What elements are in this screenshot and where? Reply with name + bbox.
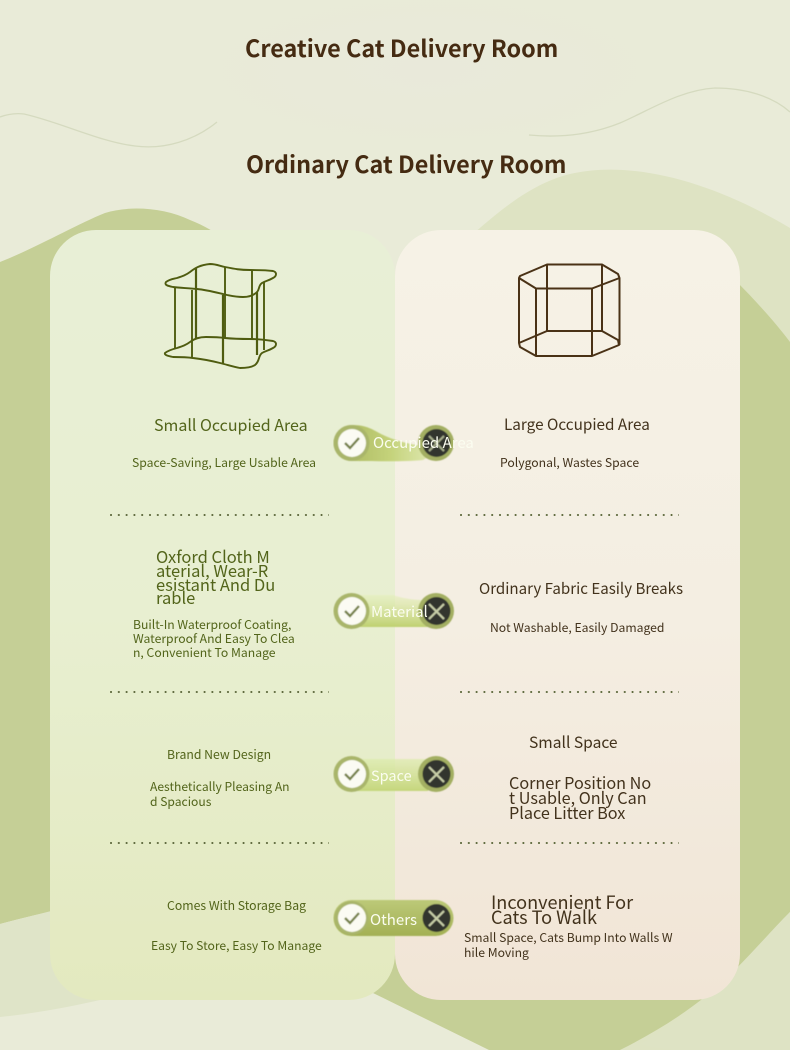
pill: others: [333, 900, 454, 937]
text: inconvenient: [491, 889, 634, 930]
pill: occupied area: Occupied Area: [373, 432, 474, 453]
text: polygonal: Polygonal, Wastes Space: [500, 453, 639, 471]
pill: others: Others: [370, 909, 417, 930]
text: aesthetically: d Spacious: [150, 793, 211, 810]
light blob right: [460, 170, 790, 1050]
text: waterproof: [133, 615, 295, 661]
text: oxford cloth: Oxford Cloth M: [156, 544, 270, 568]
text: oxford cloth: [156, 544, 275, 609]
text: aesthetically: Aesthetically Pleasing An: [150, 778, 290, 795]
panel: creative: [50, 230, 395, 1000]
pill: space: Space: [371, 765, 412, 786]
text: oxford cloth: aterial, Wear-R: [156, 558, 268, 582]
text: large occupied area: Large Occupied Area: [504, 413, 650, 435]
text: small space: Small Space: [529, 731, 618, 753]
text: waterproof: n, Convenient To Manage: [133, 643, 276, 661]
text: small space bump: Small Space, Cats Bump Into Walls W: [464, 928, 673, 946]
pill: occupied area: [333, 424, 474, 462]
panel: ordinary: [395, 230, 740, 1000]
text: small occupied area: Small Occupied Area: [154, 412, 308, 436]
icon: curved cage: [164, 263, 277, 369]
text: storage bag: Comes With Storage Bag: [167, 896, 306, 914]
text: corner position: Place Litter Box: [509, 800, 625, 824]
pill: material: Material: [371, 601, 428, 622]
text: inconvenient: Cats To Walk: [491, 904, 597, 930]
text: aesthetically: [150, 778, 290, 810]
title: ordinary: Ordinary Cat Delivery Room: [246, 146, 566, 180]
text: waterproof: Waterproof And Easy To Clea: [133, 629, 295, 647]
title: creative: Creative Cat Delivery Room: [245, 30, 558, 64]
curve lines: [0, 114, 217, 147]
text: space-saving: Space-Saving, Large Usable Area: [132, 453, 316, 471]
text: oxford cloth: rable: [156, 585, 195, 609]
divider row 1: [110, 514, 329, 516]
text: brand new design: Brand New Design: [167, 745, 271, 763]
text: corner position: t Usable, Only Can: [509, 785, 647, 809]
light band bottom left: [0, 910, 140, 1017]
text: waterproof: Built-In Waterproof Coating,: [133, 615, 291, 633]
pill: material: [333, 592, 455, 630]
pill: space: [333, 755, 455, 793]
text: small space bump: hile Moving: [464, 942, 529, 960]
text: small space bump: [464, 928, 673, 960]
text: oxford cloth: esistant And Du: [156, 572, 275, 596]
text: not washable: Not Washable, Easily Damaged: [490, 618, 664, 636]
text: corner position: Corner Position No: [509, 770, 651, 794]
text: inconvenient: Inconvenient For: [491, 889, 633, 915]
text: corner position: [509, 770, 651, 824]
text: easy to store: Easy To Store, Easy To Manage: [151, 937, 322, 954]
light blob bottom right: [640, 912, 790, 1050]
text: ordinary fabric: Ordinary Fabric Easily Breaks: [479, 577, 683, 599]
icon: hexagonal cage: [518, 264, 620, 357]
